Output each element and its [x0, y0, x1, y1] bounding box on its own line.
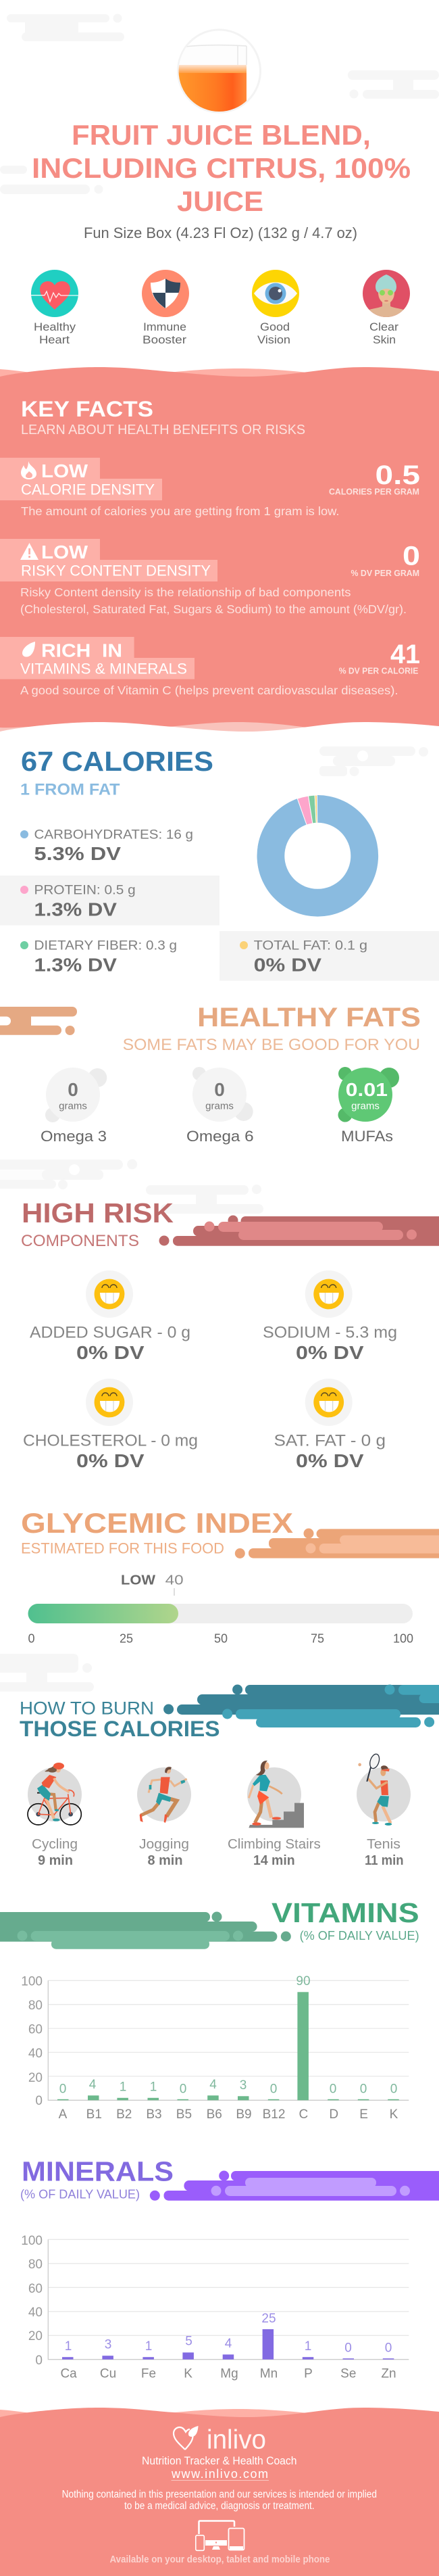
bar chart: minerals: 20	[28, 2329, 43, 2343]
bar chart: vitamins: K	[390, 2107, 398, 2122]
panel: footer	[0, 2408, 439, 2576]
title	[32, 119, 411, 217]
fact: rich in vitamins and minerals: RICH IN	[41, 640, 122, 661]
label: clear skin: Clear	[369, 320, 398, 333]
risk: cholesterol	[23, 1379, 198, 1471]
fact: low calorie density: LOW	[41, 460, 88, 481]
subheading: vitamins daily value: (% OF DAILY VALUE)	[300, 1929, 419, 1942]
bar chart: vitamins: B5	[176, 2107, 192, 2122]
legend: protein: PROTEIN: 0.5 g	[34, 883, 136, 898]
icon: healthy heart	[31, 270, 78, 317]
exercise: jogging	[137, 1767, 191, 1823]
bar chart: vitamins: E	[359, 2107, 368, 2122]
decorative bars: vitamins	[0, 1912, 291, 1949]
legend: carbohydrates	[20, 828, 193, 864]
background cloud burn	[0, 1654, 101, 1692]
disclaimer	[62, 2489, 377, 2512]
bar chart: minerals: Cu	[100, 2367, 116, 2381]
bar chart: vitamins: B1	[86, 2107, 102, 2122]
bar chart: minerals: Se	[340, 2367, 356, 2381]
fat: omega 6	[186, 1067, 254, 1145]
decorative bars: minerals	[150, 2170, 439, 2201]
bar chart: vitamins: 1	[120, 2080, 126, 2095]
risk: sodium: SODIUM - 5.3 mg	[263, 1324, 397, 1342]
decorative bars: healthy fats	[0, 1007, 77, 1035]
label: clear skin: Skin	[373, 333, 396, 346]
tagline: Nutrition Tracker & Health Coach	[142, 2454, 297, 2467]
fat: omega 3: Omega 3	[41, 1128, 107, 1145]
bar chart: vitamins: B2	[116, 2107, 132, 2122]
bar chart: vitamins: D	[329, 2107, 338, 2122]
heading: healthy fats: HEALTHY FATS	[197, 1003, 421, 1032]
bar chart: vitamins: B6	[207, 2107, 222, 2122]
label: climbing stairs	[228, 1837, 321, 1868]
icon: devices	[196, 2521, 244, 2550]
bar chart: vitamins: 1	[150, 2080, 157, 2095]
fat: omega 3: grams	[59, 1101, 87, 1112]
heading: high risk: HIGH RISK	[22, 1197, 174, 1229]
legend: dietary fiber	[20, 938, 177, 976]
fat: omega 6: grams	[205, 1101, 234, 1112]
label: healthy heart	[34, 320, 76, 346]
label: healthy heart: Healthy	[34, 320, 76, 333]
exercise: tennis	[357, 1753, 411, 1826]
label: good vision: Vision	[257, 333, 290, 346]
serving size subtitle: Fun Size Box (4.23 Fl Oz) (132 g / 4.7 oz)	[84, 224, 357, 241]
fact: low risky content density: % DV PER GRAM	[351, 569, 419, 578]
fat: omega 6: Omega 6	[186, 1128, 254, 1145]
bar chart: minerals: 3	[105, 2338, 111, 2352]
heading: vitamins: VITAMINS	[272, 1897, 419, 1928]
legend: carbohydrates: 5.3% DV	[34, 843, 121, 864]
bar chart: vitamins: 60	[28, 2023, 43, 2037]
fat: omega 3: 0	[68, 1079, 78, 1100]
label: cycling	[32, 1837, 78, 1868]
fat: mufas: 0.01	[346, 1079, 388, 1100]
label: cycling: Cycling	[32, 1837, 78, 1852]
label: immune booster: Booster	[143, 333, 186, 346]
risk: saturated fat: 0% DV	[296, 1450, 364, 1471]
heading: how to burn: HOW TO BURN	[20, 1698, 154, 1719]
bar chart: minerals: 0	[35, 2354, 43, 2368]
bar chart: minerals: 25	[261, 2312, 276, 2326]
fat: mufas: MUFAs	[341, 1128, 393, 1145]
fact: low risky content density: 0	[403, 541, 420, 571]
wave top of key facts	[0, 367, 439, 387]
bar chart: minerals: 0	[344, 2341, 352, 2355]
bar chart: vitamins: 90	[296, 1974, 311, 1988]
label: climbing stairs: 14 min	[253, 1853, 295, 1868]
bar chart: minerals: K	[184, 2367, 192, 2381]
risk: added sugar: 0% DV	[76, 1342, 145, 1363]
glycemic index gauge: 100	[393, 1632, 413, 1646]
disclaimer: Nothing contained in this presentation and our services is intended or implied	[62, 2489, 377, 2500]
logo: inlivo wordmark: inlivo	[207, 2425, 266, 2455]
heading: key facts: KEY FACTS	[21, 397, 153, 421]
bar chart: vitamins: 3	[240, 2078, 247, 2093]
fat: omega 6: 0	[214, 1079, 225, 1100]
fact: low risky content density	[0, 539, 420, 616]
fat: mufas: grams	[351, 1101, 380, 1112]
heading: glycemic index: GLYCEMIC INDEX	[21, 1507, 293, 1539]
bar chart: minerals: P	[304, 2367, 313, 2381]
risk: cholesterol: 0% DV	[76, 1450, 145, 1471]
heading: minerals: MINERALS	[22, 2156, 174, 2187]
exercise: cycling	[28, 1763, 82, 1825]
subheading: healthy fats: SOME FATS MAY BE GOOD FOR YOU	[123, 1036, 420, 1054]
bar chart: minerals: Zn	[381, 2367, 396, 2381]
bar chart: vitamins: 0	[35, 2094, 43, 2108]
subheading: estimated: ESTIMATED FOR THIS FOOD	[21, 1540, 224, 1556]
bar chart: minerals: Mn	[260, 2367, 278, 2381]
icon: good vision	[252, 270, 299, 317]
legend: total fat: TOTAL FAT: 0.1 g	[254, 938, 367, 953]
icon: clear skin	[363, 270, 410, 319]
bar chart: minerals: 1	[65, 2339, 72, 2354]
legend: total fat: 0% DV	[254, 955, 321, 976]
background clouds high risk	[0, 1159, 263, 1214]
bar chart: vitamins: B12	[263, 2107, 285, 2122]
label: climbing stairs: Climbing Stairs	[228, 1837, 321, 1852]
label: healthy heart: Heart	[39, 333, 70, 346]
legend: protein	[0, 876, 220, 926]
label: jogging: Jogging	[139, 1837, 189, 1852]
fact: low risky content density: (Cholesterol, Saturated Fat, Sugars & Sodium) to the amount (%DV/gr).	[20, 602, 407, 616]
fact: low calorie density: CALORIE DENSITY	[21, 481, 155, 498]
bar chart: minerals: 80	[28, 2258, 43, 2272]
bar chart: minerals: 1	[305, 2339, 311, 2354]
risk: added sugar	[30, 1270, 190, 1363]
glycemic index gauge: 25	[120, 1632, 133, 1646]
wave top of footer	[0, 2408, 439, 2428]
bar chart: vitamins: 0	[270, 2082, 277, 2097]
heading: calories: 67 CALORIES	[21, 746, 213, 777]
bar chart: vitamins: A	[59, 2107, 68, 2122]
bar chart: vitamins: 80	[28, 1999, 43, 2013]
fact: low calorie density: CALORIES PER GRAM	[329, 487, 419, 496]
background clouds top	[0, 14, 439, 194]
risk: cholesterol: CHOLESTEROL - 0 mg	[23, 1432, 198, 1450]
bar chart: vitamins: 0	[330, 2082, 336, 2097]
label: jogging	[139, 1837, 189, 1868]
legend: carbohydrates: CARBOHYDRATES: 16 g	[34, 828, 193, 842]
donut chart	[257, 795, 378, 917]
subheading: from fat: 1 FROM FAT	[20, 781, 120, 799]
availability note: Available on your desktop, tablet and mobile phone	[109, 2554, 330, 2565]
risk: saturated fat	[274, 1379, 386, 1471]
glycemic index gauge: 40	[165, 1573, 184, 1588]
decorative bars: glycemic index	[235, 1528, 439, 1558]
label: tennis: Tenis	[367, 1837, 401, 1852]
decorative bars: how to burn	[163, 1685, 439, 1727]
wave bottom of key facts	[0, 722, 439, 744]
bar chart: minerals: 5	[185, 2335, 192, 2349]
fact: rich in vitamins and minerals: % DV PER CALORIE	[339, 667, 418, 676]
legend: dietary fiber: DIETARY FIBER: 0.3 g	[34, 938, 177, 953]
bar chart: vitamins: 0	[390, 2082, 397, 2097]
bar chart: minerals: 100	[21, 2234, 43, 2248]
fact: rich in vitamins and minerals: VITAMINS & MINERALS	[20, 661, 187, 677]
bar chart: minerals: 4	[225, 2337, 232, 2351]
exercise: climbing stairs	[247, 1761, 304, 1828]
subheading: components: COMPONENTS	[21, 1232, 139, 1250]
bar chart: vitamins: 4	[209, 2078, 217, 2092]
bar chart: vitamins: B9	[236, 2107, 252, 2122]
bar chart: minerals: Fe	[141, 2367, 156, 2381]
heading: those calories: THOSE CALORIES	[20, 1717, 220, 1741]
label: good vision: Good	[260, 320, 290, 333]
risk: sodium	[263, 1270, 397, 1363]
fact: rich in vitamins and minerals	[0, 637, 420, 697]
bar chart: minerals	[21, 2234, 409, 2381]
bar chart: vitamins: 0	[360, 2082, 367, 2097]
label: cycling: 9 min	[38, 1853, 73, 1868]
hero juice glass	[177, 30, 261, 113]
panel: key facts	[0, 367, 439, 744]
decorative bars: high risk	[159, 1216, 439, 1246]
risk: saturated fat: SAT. FAT - 0 g	[274, 1432, 386, 1450]
label: immune booster	[143, 320, 186, 346]
subheading: key facts: LEARN ABOUT HEALTH BENEFITS OR RISKS	[21, 422, 305, 437]
title: INCLUDING CITRUS, 100%	[32, 152, 411, 184]
glycemic index gauge: LOW	[121, 1573, 155, 1588]
fact: low calorie density: 0.5	[376, 460, 420, 490]
disclaimer: to be a medical advice, diagnosis or treatment.	[124, 2500, 315, 2512]
bar chart: vitamins: 0	[180, 2082, 186, 2097]
bar chart: vitamins: 40	[28, 2047, 43, 2061]
fact: rich in vitamins and minerals: 41	[390, 640, 420, 669]
legend: total fat	[220, 931, 439, 981]
glycemic index gauge: 0	[28, 1632, 35, 1646]
glycemic index gauge: 50	[214, 1632, 228, 1646]
title: JUICE	[177, 185, 263, 217]
label: immune booster: Immune	[143, 320, 186, 333]
risk: added sugar: ADDED SUGAR - 0 g	[30, 1324, 190, 1342]
subheading: minerals daily value: (% OF DAILY VALUE)	[20, 2188, 140, 2201]
title: FRUIT JUICE BLEND,	[72, 119, 371, 151]
website link: www.inlivo.com	[171, 2467, 268, 2481]
glycemic index gauge	[28, 1573, 413, 1646]
fact: low calorie density	[0, 458, 420, 518]
fat: omega 3	[41, 1068, 107, 1145]
risk: sodium: 0% DV	[296, 1342, 364, 1363]
glycemic index gauge: 75	[311, 1632, 324, 1646]
label: tennis: 11 min	[365, 1853, 404, 1868]
label: jogging: 8 min	[147, 1853, 182, 1868]
fact: low risky content density: RISKY CONTENT DENSITY	[21, 563, 211, 579]
bar chart: minerals: 40	[28, 2306, 43, 2320]
logo: inlivo heart	[174, 2426, 199, 2450]
bar chart: vitamins: 4	[89, 2078, 97, 2092]
label: tennis	[365, 1837, 404, 1868]
fact: low calorie density: The amount of calories you are getting from 1 gram is low.	[21, 504, 339, 518]
legend: dietary fiber: 1.3% DV	[34, 955, 117, 976]
fat: mufas	[338, 1067, 399, 1145]
bar chart: vitamins: 0	[59, 2082, 66, 2097]
legend: protein: 1.3% DV	[34, 899, 117, 920]
bar chart: minerals: 60	[28, 2282, 43, 2296]
background cloud calories	[319, 746, 428, 776]
bar chart: minerals: Mg	[220, 2367, 238, 2381]
fact: low risky content density: Risky Content density is the relationship of bad components	[20, 586, 351, 599]
fact: rich in vitamins and minerals: A good source of Vitamin C (helps prevent cardiovascular diseases).	[20, 684, 398, 697]
bar chart: vitamins: C	[299, 2107, 308, 2122]
icon: immune booster	[142, 270, 189, 317]
bar chart: vitamins	[21, 1974, 409, 2122]
bar chart: vitamins: 20	[28, 2071, 43, 2085]
bar chart: minerals: 1	[145, 2339, 152, 2354]
label: clear skin	[369, 320, 398, 346]
bar chart: vitamins: B3	[146, 2107, 162, 2122]
bar chart: minerals: 0	[385, 2341, 392, 2355]
bar chart: minerals: Ca	[60, 2367, 77, 2381]
bar chart: vitamins: 100	[21, 1975, 43, 1989]
fact: low risky content density: LOW	[41, 542, 88, 563]
label: good vision	[257, 320, 290, 346]
